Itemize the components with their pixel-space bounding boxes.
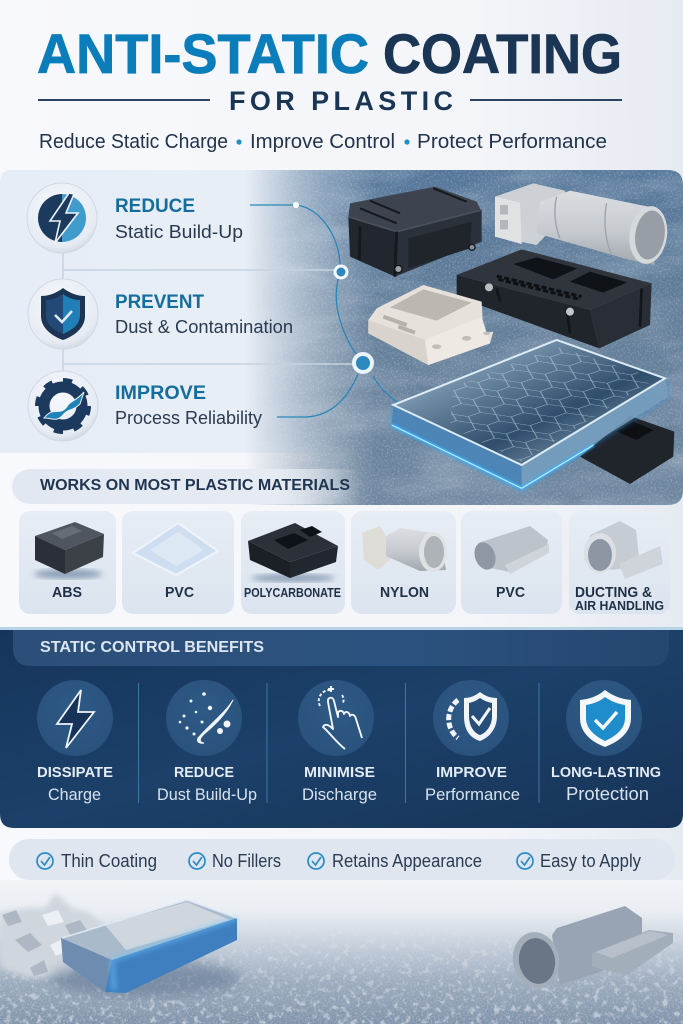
material card: nylon <box>351 511 456 614</box>
benefit: reduce dust build-up: REDUCE <box>174 764 234 781</box>
grey duct fitting <box>495 183 671 266</box>
rubble pile <box>0 893 104 978</box>
panel: hero with moulded plastic parts <box>0 170 683 510</box>
benefit: minimise discharge <box>298 680 377 804</box>
benefit: long-lasting protection: Protection <box>566 784 649 804</box>
item: improve process reliability: Process Reliability <box>115 408 262 428</box>
icon: shield <box>41 288 85 340</box>
clear plastic box with blue glow <box>50 900 240 996</box>
icon: lightning bolt <box>57 690 94 748</box>
material card: polycarbonate <box>241 511 345 614</box>
material card: PVC pipe: PVC <box>496 584 525 601</box>
item: reduce static build-up: Static Build-Up <box>115 222 243 242</box>
icon: touching hand <box>319 686 362 749</box>
icon: pale fitting <box>362 526 447 572</box>
tagline: Protect Performance <box>417 131 607 153</box>
small black box behind plate <box>580 416 674 484</box>
benefit: minimise discharge: Discharge <box>302 785 377 804</box>
feature: no fillers <box>189 851 281 871</box>
icon: black block <box>34 522 104 579</box>
product photo group <box>348 183 674 490</box>
material card: polycarbonate: POLYCARBONATE <box>244 585 341 600</box>
glowing glass plate <box>373 330 673 490</box>
material card: ducting and air handling <box>569 511 670 614</box>
icon: clear tray <box>133 523 218 575</box>
icon: gear and shield <box>449 692 497 741</box>
benefits heading bar: STATIC CONTROL BENEFITS <box>40 639 264 656</box>
benefit: minimise discharge: MINIMISE <box>304 764 375 781</box>
title <box>37 22 622 85</box>
feature: easy to apply: Easy to Apply <box>540 851 641 871</box>
feature: retains appearance: Retains Appearance <box>332 851 482 871</box>
material card: ducting and air handling: AIR HANDLING <box>575 598 664 613</box>
black housing <box>348 187 482 277</box>
white moulded block <box>368 285 493 365</box>
material card: ducting and air handling: DUCTING & <box>575 584 652 601</box>
heading bar: works on most plastic materials <box>12 469 360 504</box>
tagline: Improve Control <box>250 131 395 153</box>
benefit: dissipate charge: Charge <box>48 785 101 804</box>
title: ANTI-STATIC <box>37 22 369 85</box>
icon: duct with mount <box>584 521 663 579</box>
item: prevent dust and contamination: PREVENT <box>115 292 204 313</box>
heading bar: works on most plastic materials: WORKS ON MOST PLASTIC MATERIALS <box>40 477 350 494</box>
material card: PVC clear: PVC <box>165 584 194 601</box>
connector nodes <box>293 202 372 372</box>
icon: gear with trend line <box>38 381 88 431</box>
feature: thin coating: Thin Coating <box>61 851 157 871</box>
subtitle: for plastic: FOR PLASTIC <box>229 86 453 116</box>
icon: blue shield <box>580 690 631 747</box>
benefit: improve performance: Performance <box>425 785 520 804</box>
item: prevent dust and contamination <box>28 279 293 349</box>
benefits heading bar <box>13 630 669 666</box>
feature: no fillers: No Fillers <box>212 851 281 871</box>
grey pipe fitting <box>508 906 673 992</box>
benefit: reduce dust build-up <box>157 680 257 804</box>
benefit: dissipate charge: DISSIPATE <box>37 764 113 781</box>
divider lines and connector <box>63 205 402 417</box>
benefit: dissipate charge <box>37 680 113 804</box>
icon: black vented housing <box>248 523 338 582</box>
item: improve process reliability: IMPROVE <box>115 383 206 404</box>
material card: nylon: NYLON <box>380 584 429 601</box>
material card: ABS: ABS <box>52 584 82 601</box>
material card: PVC clear <box>122 511 234 614</box>
benefit: long-lasting protection: LONG-LASTING <box>551 764 661 781</box>
item: improve process reliability <box>28 371 262 441</box>
title: COATING <box>383 22 622 85</box>
benefit: improve performance <box>425 680 520 804</box>
item: reduce static build-up: REDUCE <box>115 196 195 217</box>
icon: lightning disc <box>38 193 86 243</box>
material card: PVC pipe <box>461 511 562 614</box>
tagline <box>39 131 607 153</box>
black vented tray housing <box>457 249 652 348</box>
material card: ABS <box>19 511 116 614</box>
item: reduce static build-up <box>27 183 243 253</box>
feature strip <box>9 839 675 880</box>
benefit: long-lasting protection <box>551 680 661 804</box>
benefit: improve performance: IMPROVE <box>436 764 507 781</box>
panel: static control benefits <box>0 627 683 828</box>
tagline: Reduce Static Charge <box>39 131 228 153</box>
icon: grey pipe <box>471 526 549 574</box>
item: prevent dust and contamination: Dust & Contamination <box>115 317 293 337</box>
benefit: reduce dust build-up: Dust Build-Up <box>157 785 257 804</box>
icon: dust and brush stroke <box>179 692 233 743</box>
bottom floor photo <box>0 880 683 1024</box>
